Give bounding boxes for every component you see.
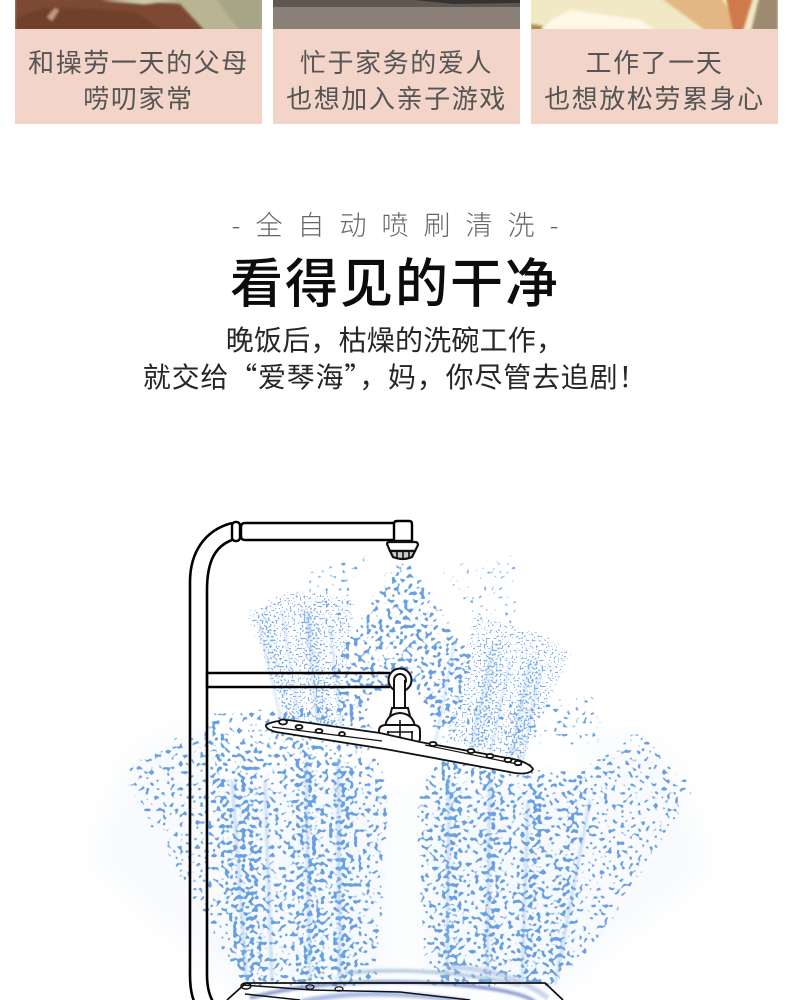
panel: spouse card xyxy=(273,0,520,124)
body text xyxy=(143,319,647,396)
caption: spouse xyxy=(286,43,507,116)
body text: 晚饭后，枯燥的洗碗工作， xyxy=(226,319,564,359)
caption: worker: 也想放松劳累身心 xyxy=(544,79,765,116)
body text: 就交给“爱琴海”，妈，你尽管去追剧！ xyxy=(143,356,647,396)
caption: spouse: 也想加入亲子游戏 xyxy=(286,79,507,116)
arm: connector pipe xyxy=(207,673,390,687)
caption: parents: 唠叨家常 xyxy=(83,79,194,116)
photo: sofa xyxy=(273,0,520,29)
spray: lower left fan xyxy=(115,720,262,990)
caption: worker: 工作了一天 xyxy=(585,43,724,80)
caption: worker xyxy=(544,43,765,116)
spray: lower right columns xyxy=(412,745,585,990)
photo: hands xyxy=(15,0,262,29)
caption: parents xyxy=(28,43,249,116)
lower spray arm xyxy=(227,967,563,1000)
horizontal upper pipe xyxy=(241,523,394,540)
panel: parents card xyxy=(15,0,262,124)
icon: middle elbow and hub xyxy=(379,668,420,743)
frame: water pipe xyxy=(190,521,412,1000)
subheading: -全自动喷刷清洗- xyxy=(232,204,573,243)
caption: spouse: 忙于家务的爱人 xyxy=(300,43,493,80)
spray: lower right fan xyxy=(545,725,700,990)
icon: upper spray nozzle xyxy=(387,542,418,559)
caption: parents: 和操劳一天的父母 xyxy=(28,43,249,80)
spray: top nozzle cone xyxy=(325,560,480,730)
spray: lower left columns xyxy=(205,700,395,990)
photo: cushions xyxy=(531,0,778,29)
middle spray bar xyxy=(266,720,533,774)
title: 看得见的干净 xyxy=(230,242,560,318)
spray: soft haze xyxy=(90,720,710,985)
spray: jet streaks xyxy=(232,610,590,985)
water ripples xyxy=(250,967,548,1000)
pipe collar xyxy=(232,522,240,541)
upper nozzle fitting xyxy=(394,521,412,541)
spray: large droplets xyxy=(115,548,700,990)
panel: worker card xyxy=(531,0,778,124)
spray: fine droplets from middle arm xyxy=(240,585,578,765)
